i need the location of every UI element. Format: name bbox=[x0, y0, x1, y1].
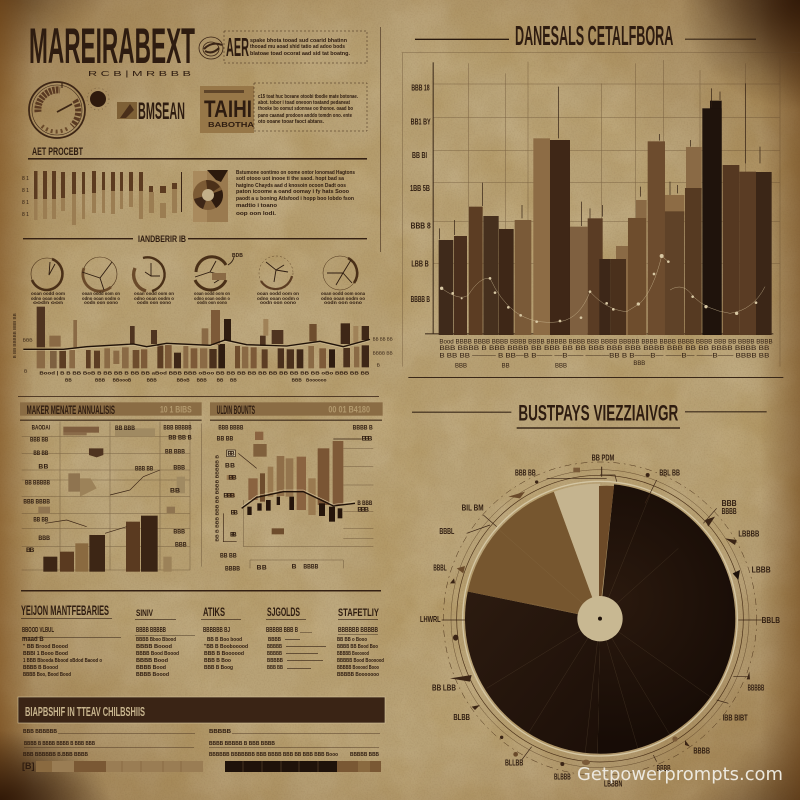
mixed bar and line chart: BBB bbox=[95, 378, 106, 383]
labels: BB BB bbox=[217, 436, 233, 443]
labels: BAODAI bbox=[32, 424, 50, 431]
labels: BB BBB bbox=[115, 425, 135, 432]
column: SINIV: BBBB Boood bbox=[136, 644, 172, 650]
badge: BMSEAN bbox=[117, 98, 185, 125]
footer rows: left: BBB BBBBBB B.BBB BBBB bbox=[23, 752, 88, 758]
labels: BBB BBBBB bbox=[163, 424, 192, 431]
pie labels: LBBBB bbox=[738, 528, 759, 538]
x axis labels: BB bbox=[502, 363, 510, 369]
labels: BB bbox=[231, 509, 238, 516]
column: SINIV: BBBB Bood bbox=[136, 658, 168, 664]
labels: BB bbox=[170, 488, 180, 495]
footer rows: left bbox=[22, 729, 195, 771]
x axis labels bbox=[439, 339, 773, 369]
leader lines bbox=[442, 475, 762, 762]
panel: left chart bbox=[20, 402, 202, 572]
gauge 2: ooan oodd oom on bbox=[82, 291, 120, 296]
x axis labels: Bood BBBB BBBB BBBB BBBB BBBB BBBBB BBBB BBB BBBB BBBBB BBBB BBBB BBBB BBBB BBB BB BBBB BBBB bbox=[439, 339, 773, 345]
footer rows: right: BBBBB bbox=[209, 729, 231, 735]
labels: BBB bbox=[175, 542, 187, 549]
bars bbox=[439, 101, 772, 335]
column: SINIV: SINIV bbox=[136, 608, 153, 618]
outer rings bbox=[443, 462, 757, 775]
gauge 6: ooan oodd oom oona bbox=[321, 291, 365, 296]
pie labels: BBBB bbox=[657, 763, 671, 773]
axis labels: B bbox=[377, 363, 381, 369]
column: YEIJON MANTFEBARIES: maad B bbox=[22, 637, 44, 643]
gauge 3: ooan oodd oom on bbox=[134, 291, 174, 296]
right column rule bbox=[379, 27, 382, 252]
gauge 2: odno ooan oodm o bbox=[82, 296, 120, 301]
pie labels: BLBBB bbox=[554, 772, 571, 782]
grid bbox=[202, 423, 373, 568]
x axis labels: BBB bbox=[633, 361, 645, 367]
column: YEIJON MANTFEBARIES: BBBB B Boood bbox=[23, 665, 58, 671]
column: SJGOLDS bbox=[266, 605, 326, 671]
gauge 3: odno ooan oodm o bbox=[134, 296, 174, 301]
bars bbox=[43, 516, 158, 572]
pie labels: BLBB bbox=[453, 712, 470, 722]
y axis labels bbox=[410, 83, 431, 304]
divider bbox=[18, 395, 379, 398]
panel header: 10 1 BIBS bbox=[160, 405, 192, 415]
icon: segmented donut bbox=[193, 170, 228, 222]
labels: BB bbox=[230, 532, 237, 539]
column: STAFETLIY: BBBBB Boooood bbox=[337, 651, 369, 657]
gauge 6: oodn oon oono bbox=[324, 300, 362, 305]
x axis labels: BBB BBBB B BBB BBBB BB BBB BB BB BBB BBB BBB BBBB BBB BB BB BBBB BBBB BB bbox=[439, 346, 769, 352]
trend line bbox=[23, 339, 370, 349]
grid bbox=[22, 422, 190, 570]
gauge 2 bbox=[82, 257, 120, 305]
column: ATIKS: BBB B Boo bbox=[204, 658, 232, 664]
y axis labels: LBB B bbox=[411, 259, 429, 269]
footer strip: right bbox=[225, 761, 381, 772]
panel header: 00 01 B4180 bbox=[328, 405, 370, 415]
mixed bar and line chart: Boooooo bbox=[306, 378, 327, 383]
line series bbox=[442, 256, 765, 322]
footer rows: right: BBBBBB BBBBBBB BBB BBBB BBB BB BBB BBB Booo bbox=[209, 752, 339, 758]
column: YEIJON MANTFEBARIES: BBBB Boo, Bood Bood bbox=[23, 672, 71, 678]
pie labels: LHWRL bbox=[420, 614, 441, 624]
column: SJGOLDS: BBB BB bbox=[267, 665, 283, 671]
bar strip chart: 8 1 bbox=[22, 188, 29, 194]
column: YEIJON MANTFEBARIES bbox=[21, 602, 121, 678]
label: AET PROCEBT: AET PROCEBT bbox=[32, 146, 83, 158]
axis labels: B bbox=[24, 368, 28, 374]
column: SINIV: BBBB Bood bbox=[136, 665, 166, 671]
axis labels bbox=[12, 313, 393, 374]
panel: pie chart bbox=[412, 401, 780, 788]
gauge 1: odno ooan oodm bbox=[31, 296, 65, 301]
panel header bbox=[210, 402, 383, 421]
labels: BBB bbox=[357, 507, 369, 514]
x axis labels: BBB bbox=[555, 363, 567, 369]
labels bbox=[215, 424, 373, 573]
text block: donut description: hatgino Chayds aad d knosoin ocoon Dadt oos bbox=[236, 183, 346, 189]
bar strip chart: 8 1 bbox=[22, 176, 29, 182]
gauge 1 bbox=[31, 258, 65, 305]
column: STAFETLIY: BBBBB Bood Boooood bbox=[337, 658, 384, 664]
column: SINIV bbox=[135, 608, 195, 678]
column: STAFETLIY: BB BB o Booo bbox=[337, 637, 368, 643]
pie labels: BBBB bbox=[722, 506, 737, 516]
callout: AER: AER bbox=[226, 32, 249, 62]
text block: donut description: paodt a u boning Atlsfood i hopp boo lobdo fson bbox=[236, 196, 355, 202]
gauge 1: ooan oodd oom bbox=[31, 291, 65, 296]
labels: BBBB bbox=[303, 563, 318, 570]
y axis labels: BBB 8 bbox=[411, 221, 431, 231]
column: STAFETLIY bbox=[337, 607, 384, 678]
labels: BBB BBBB bbox=[218, 424, 243, 431]
y axis labels: BB1 BY bbox=[411, 117, 431, 127]
labels: BBB BB bbox=[30, 437, 48, 444]
patches bbox=[38, 427, 185, 572]
pie labels: BBBB bbox=[693, 745, 710, 755]
bar strip chart bbox=[22, 171, 182, 225]
labels: BBB bbox=[173, 528, 185, 535]
trend line bbox=[242, 492, 355, 508]
mixed bar and line chart: BBoB bbox=[177, 378, 190, 383]
text: MAREIRABEXT bbox=[29, 18, 195, 74]
gauge 1: oodn oon bbox=[33, 300, 63, 305]
labels: BB bbox=[227, 450, 235, 457]
footer rows: left: BBBB B BBBB BBBB B BBB BBB bbox=[24, 741, 95, 747]
footer strip: left bbox=[36, 761, 203, 772]
column: YEIJON MANTFEBARIES: 1 BBB Bbooda Bbood oBdod Baood o bbox=[23, 658, 103, 664]
column: YEIJON MANTFEBARIES: YEIJON MANTFEBARIES bbox=[21, 602, 109, 618]
labels: BB BB bbox=[220, 553, 237, 560]
text block: badge description: thooke bo oomut sdonnae oo thonoe. oaad bo bbox=[258, 106, 353, 112]
column: ATIKS bbox=[201, 605, 248, 671]
bar strip chart: 8 1 bbox=[22, 212, 29, 218]
labels: BB bbox=[225, 463, 235, 470]
labels: BB BB bbox=[33, 450, 48, 457]
column: SJGOLDS: BBBBB bbox=[267, 658, 283, 664]
footer rows: right: BBBB BBBBB B BBB BBBB bbox=[209, 741, 275, 747]
pie labels bbox=[420, 453, 780, 788]
text block: badge description: abot. tobor i toad oneoon toatand pedaneat bbox=[258, 100, 350, 106]
wedge seams bbox=[487, 495, 710, 755]
text block: donut description: Bstumone oontimo on oome ontor lonomad Hagtons bbox=[236, 170, 355, 176]
labels: BB BBBBB bbox=[25, 479, 50, 486]
pie labels: BB LBB bbox=[432, 682, 456, 692]
gauge 3: oodn oon oono bbox=[137, 300, 171, 305]
footer rows: left: BBB BBBBBB bbox=[23, 729, 57, 735]
panel header: ULDIN BOUNTS bbox=[217, 403, 255, 417]
icon: dark dot bbox=[87, 88, 109, 110]
column: SJGOLDS: SJGOLDS bbox=[267, 605, 300, 619]
axis labels: BBBB BB bbox=[373, 351, 393, 357]
pie labels: LBBB bbox=[752, 564, 771, 574]
text block: donut description bbox=[236, 170, 355, 217]
divider bbox=[21, 590, 381, 592]
column: SJGOLDS: BBBBB bbox=[267, 651, 282, 657]
column: ATIKS: ATIKS bbox=[203, 605, 225, 619]
gauge 5: odno ooan oodm o bbox=[257, 296, 299, 301]
column: ATIKS: BBBBBB BJ bbox=[203, 627, 230, 634]
gauge 6: odno ooan oodm oo bbox=[321, 296, 365, 301]
pie labels: BBBL bbox=[439, 526, 455, 536]
center hub bbox=[577, 596, 623, 641]
column: SINIV: BBBB Boood bbox=[136, 672, 169, 678]
column: STAFETLIY: BBBBBB BBBBB bbox=[338, 627, 378, 634]
column: STAFETLIY: BBBBB Booooooo bbox=[337, 672, 380, 678]
mixed bar and line chart: BBB bbox=[292, 378, 302, 383]
icon: swirl emblem bbox=[199, 37, 223, 59]
badge: TAIHI: BABOTHA bbox=[208, 122, 254, 129]
text block: badge description: oto ooane tooar faoct abtans. bbox=[258, 119, 324, 125]
trend lines bbox=[45, 470, 160, 533]
column: YEIJON MANTFEBARIES: BBOOD VLBUL bbox=[22, 627, 54, 634]
text block: donut description: oop oon lodi. bbox=[236, 211, 277, 217]
pie labels: BLLBB bbox=[505, 757, 523, 767]
heading: BUSTPAYS VIEZZIAIVGR bbox=[518, 401, 678, 426]
column: SINIV: BBBB Bboo Bbood bbox=[136, 637, 176, 643]
callout: AER: thooad mu aoad shid tatio ad adoo bods bbox=[250, 44, 345, 50]
footer rows: left: [B] bbox=[22, 761, 34, 771]
labels: BB bbox=[38, 463, 49, 470]
axis labels: BB BB BB bbox=[373, 337, 393, 343]
pie labels: BBBL bbox=[433, 562, 447, 572]
gauge 5: ooan oodd oom on bbox=[257, 291, 299, 296]
labels: BB B BBB BBB BB BBBB BBBBB B bbox=[215, 455, 221, 542]
labels: BB bbox=[26, 547, 35, 554]
labels: BB bbox=[228, 474, 237, 481]
mixed bar and line chart: BB bbox=[217, 378, 224, 383]
text block: badge description: c15 toat huc bceane otoobi tbodie mate botonae. bbox=[258, 94, 358, 100]
category labels: Bood | B B BB BoB B BB BB B BB BB aBod BBB BBB oBoo BB BB BB BB BB BB BB BB BB BB oBo BBB BB BB bbox=[39, 370, 370, 375]
text block: donut description: paton icoome a oand oomay i fy hats Sooo bbox=[236, 189, 350, 195]
pie labels: BIL BM bbox=[462, 502, 484, 512]
labels: BBB bbox=[38, 535, 50, 542]
badge: TAIHI: TAIHI bbox=[204, 96, 252, 123]
text block: badge description bbox=[254, 83, 367, 131]
column: ATIKS: BBB B Boooood bbox=[204, 651, 244, 657]
watermark: Getpowerprompts.com bbox=[577, 764, 783, 785]
gauge 4: ooan oodd oom on bbox=[194, 291, 230, 296]
gauge 3 bbox=[134, 257, 174, 305]
divider bbox=[28, 158, 367, 160]
text: BMSEAN bbox=[138, 98, 185, 125]
column: STAFETLIY: STAFETLIY bbox=[338, 607, 379, 619]
callout: AER: spake bhota tooad sud coarid bhatinn bbox=[250, 38, 348, 44]
frame and grid bbox=[402, 53, 800, 367]
labels: BB BBB bbox=[165, 448, 185, 455]
bar strip chart: 8 1 bbox=[22, 200, 29, 206]
panel: main bar chart bbox=[402, 20, 800, 378]
subtitle: R C B | M R B B B bbox=[88, 71, 192, 78]
column: YEIJON MANTFEBARIES: BBBI 1 Booo Bood bbox=[23, 651, 68, 657]
labels: BBB bbox=[173, 464, 185, 471]
pie labels: BBB BB bbox=[515, 468, 536, 478]
labels: BB BB B bbox=[168, 434, 192, 441]
gauge 4: oodn oon oono bbox=[197, 300, 227, 305]
labels: B bbox=[292, 563, 297, 570]
text block: donut description: madtio i toano bbox=[236, 203, 278, 209]
icon: clock gauge bbox=[29, 82, 85, 138]
column: SJGOLDS: BBBBB BBB B bbox=[266, 627, 298, 634]
y axis labels: BBBB B bbox=[411, 294, 430, 304]
labels: BB BB bbox=[33, 517, 48, 524]
footer rows: right bbox=[209, 729, 380, 758]
footer rows: right: BBBBB BBB bbox=[350, 752, 379, 758]
gauge 5 bbox=[257, 256, 299, 305]
pie labels: IBB BIBT bbox=[723, 712, 748, 722]
labels: BBB BB bbox=[135, 466, 153, 473]
table section bbox=[21, 602, 384, 678]
labels: B BBB bbox=[357, 500, 372, 507]
y axis labels: 1BB 5B bbox=[410, 183, 430, 193]
text block: donut description: sotl otooo uot inooe ti the saod. hopt bad sa bbox=[236, 176, 345, 182]
panel: right chart bbox=[202, 402, 383, 573]
upper bars bbox=[37, 307, 369, 347]
gauge 2: oodn oon oono bbox=[84, 300, 118, 305]
labels: BB bbox=[257, 564, 267, 571]
mixed bar and line chart bbox=[12, 307, 393, 383]
banner: BIAPBSHIF IN TTEAV CHILBSHIIS bbox=[25, 704, 145, 719]
column: YEIJON MANTFEBARIES: " BB Brood Boood bbox=[23, 644, 68, 650]
pie markers bbox=[450, 467, 750, 766]
y axis labels: BBB 18 bbox=[411, 83, 430, 93]
column: SINIV: BBBB Bood Boood bbox=[136, 651, 179, 657]
labels: BBBB B bbox=[353, 424, 373, 431]
column: STAFETLIY: BBBBB Booood Booo bbox=[337, 665, 379, 671]
column: STAFETLIY: BBBB BB Bood Boo bbox=[337, 644, 378, 650]
dark lower bars bbox=[247, 497, 342, 522]
axis labels: BBB bbox=[23, 338, 33, 344]
x axis labels: B BB BB ——— B BB—B B—— —B—— ———BB B B——B— ——B— ——B—— BBBB BB bbox=[439, 353, 769, 359]
pie labels: BB PDM bbox=[592, 453, 614, 463]
section heading with rules: IANDBERIR IB bbox=[138, 234, 186, 244]
gauge row bbox=[31, 253, 365, 305]
x axis labels: BBB bbox=[455, 363, 467, 369]
column: ATIKS: BBB B Boog bbox=[204, 665, 233, 671]
pie labels: BBBBB bbox=[748, 682, 764, 692]
pie labels: BBL BB bbox=[659, 467, 680, 477]
callout: AER: blatoae toad ocorat aad sid tat boatng. bbox=[250, 51, 350, 57]
callout: AER bbox=[224, 31, 367, 63]
column: SINIV: BBBB BBBBB bbox=[136, 627, 166, 634]
labels bbox=[23, 424, 192, 554]
mixed bar and line chart: BB bbox=[230, 378, 237, 383]
bars bbox=[227, 432, 343, 534]
axis labels: B BB BBBBB BBB BB bbox=[12, 313, 17, 358]
lower bars bbox=[37, 344, 369, 369]
mixed bar and line chart: BBB bbox=[197, 378, 207, 383]
y axis labels: BB BI bbox=[412, 150, 427, 160]
gauge 4: odno ooan oodm o bbox=[194, 296, 230, 301]
pie labels: LBBBN bbox=[604, 778, 622, 788]
labels: BBBB bbox=[225, 566, 240, 573]
gauge 4: BDB bbox=[232, 253, 243, 259]
panel header: MAKER MENATE ANNUALISIS bbox=[27, 403, 115, 417]
labels: BBB bbox=[223, 492, 235, 499]
text block: badge description: pano caanad prodoon anddo tomdn ono. ente bbox=[258, 113, 352, 119]
column: ATIKS: "BB B Boobooood bbox=[204, 644, 248, 650]
title block bbox=[29, 18, 195, 78]
column: ATIKS: BB B Boo bood bbox=[207, 637, 242, 643]
pie labels: BBLB bbox=[762, 615, 780, 625]
column: SJGOLDS: BBBBB bbox=[267, 644, 282, 650]
mixed bar and line chart: BBB bbox=[147, 378, 157, 383]
gauge 5: oodn oon oono bbox=[260, 300, 296, 305]
labels: BBB bbox=[362, 436, 373, 443]
pie labels: BBB bbox=[722, 498, 737, 508]
gauge 4 bbox=[194, 253, 243, 305]
gauge 6 bbox=[321, 256, 365, 305]
mixed bar and line chart: BBoooB bbox=[113, 378, 132, 383]
badge: TAIHI bbox=[200, 86, 254, 133]
mixed bar and line chart: BB bbox=[65, 378, 72, 383]
column: SJGOLDS: BBBB bbox=[268, 637, 281, 643]
bar tick marks bbox=[439, 83, 760, 239]
wedges bbox=[465, 484, 735, 754]
labels: BBB BBBB bbox=[23, 498, 50, 505]
banner bbox=[18, 697, 385, 723]
